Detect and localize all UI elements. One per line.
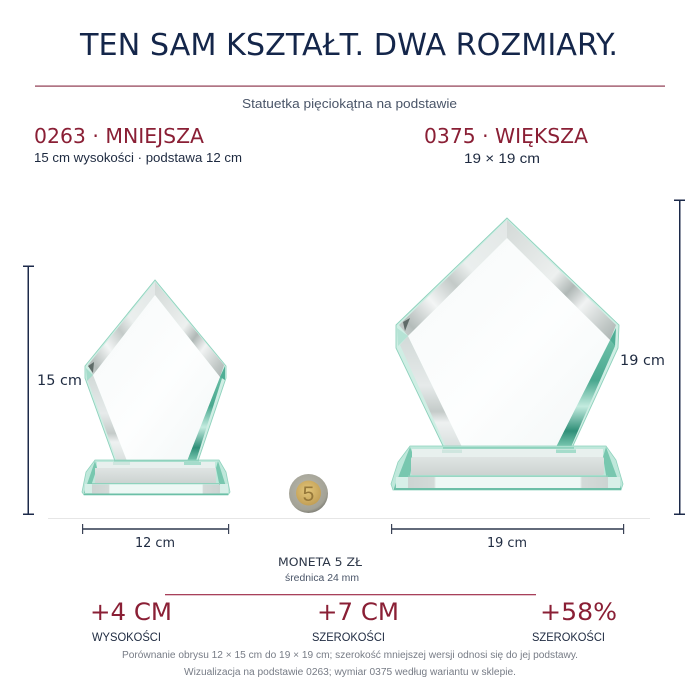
coin caption: średnica 24 mm xyxy=(285,573,359,584)
heading: larger model: 0375 · WIĘKSZA xyxy=(424,124,588,148)
footnote: Porównanie obrysu 12 × 15 cm do 19 × 19 cm; szerokość mniejszej wersji odnosi się do jej podstawy. xyxy=(122,650,578,661)
title: TEN SAM KSZTAŁT. DWA ROZMIARY. xyxy=(79,28,618,63)
width dimension: small xyxy=(82,524,229,534)
glass body xyxy=(85,280,226,461)
stat: height: +4 CM xyxy=(90,598,172,626)
stat: percentage xyxy=(532,598,617,644)
footnote xyxy=(122,650,578,678)
glass base xyxy=(82,460,230,495)
stat: height: WYSOKOŚCI xyxy=(92,631,161,644)
subtitle: Statuetka pięciokątna na podstawie xyxy=(242,97,457,111)
width dimension: large xyxy=(391,524,624,534)
coin caption: MONETA 5 ZŁ xyxy=(278,555,363,569)
height label: 15 cm: 15 cm xyxy=(37,373,82,389)
heading: larger model xyxy=(424,124,588,166)
glass base xyxy=(391,446,623,490)
stat: width: SZEROKOŚCI xyxy=(312,631,385,644)
heading: larger model: 19 × 19 cm xyxy=(464,150,540,166)
glass body xyxy=(396,218,619,448)
heading: smaller model: 0263 · MNIEJSZA xyxy=(34,124,204,148)
trophy: small glass award 0263 xyxy=(82,280,230,495)
ground line xyxy=(48,518,650,519)
heading: smaller model xyxy=(34,124,242,165)
stats rule xyxy=(165,594,536,595)
stat: width: +7 CM xyxy=(317,598,399,626)
stat: percentage: +58% xyxy=(540,598,617,626)
heading: smaller model: 15 cm wysokości · podstawa 12 cm xyxy=(34,150,242,165)
width label: 19 cm: 19 cm xyxy=(487,536,527,551)
height dimension: large xyxy=(674,200,685,515)
stat: width xyxy=(312,598,399,644)
stat: percentage: SZEROKOŚCI xyxy=(532,631,605,644)
height label: 19 cm: 19 cm xyxy=(620,353,665,369)
title rule xyxy=(35,86,665,87)
coin caption xyxy=(278,555,363,584)
height dimension: small xyxy=(23,266,34,515)
width label: 12 cm: 12 cm xyxy=(135,536,175,551)
trophy: large glass award 0375 xyxy=(391,218,623,490)
coin: 5 zł: 5 xyxy=(303,483,314,506)
coin: 5 zł xyxy=(289,474,328,513)
stat: height xyxy=(90,598,172,644)
footnote: Wizualizacja na podstawie 0263; wymiar 0375 według wariantu w sklepie. xyxy=(184,667,516,678)
